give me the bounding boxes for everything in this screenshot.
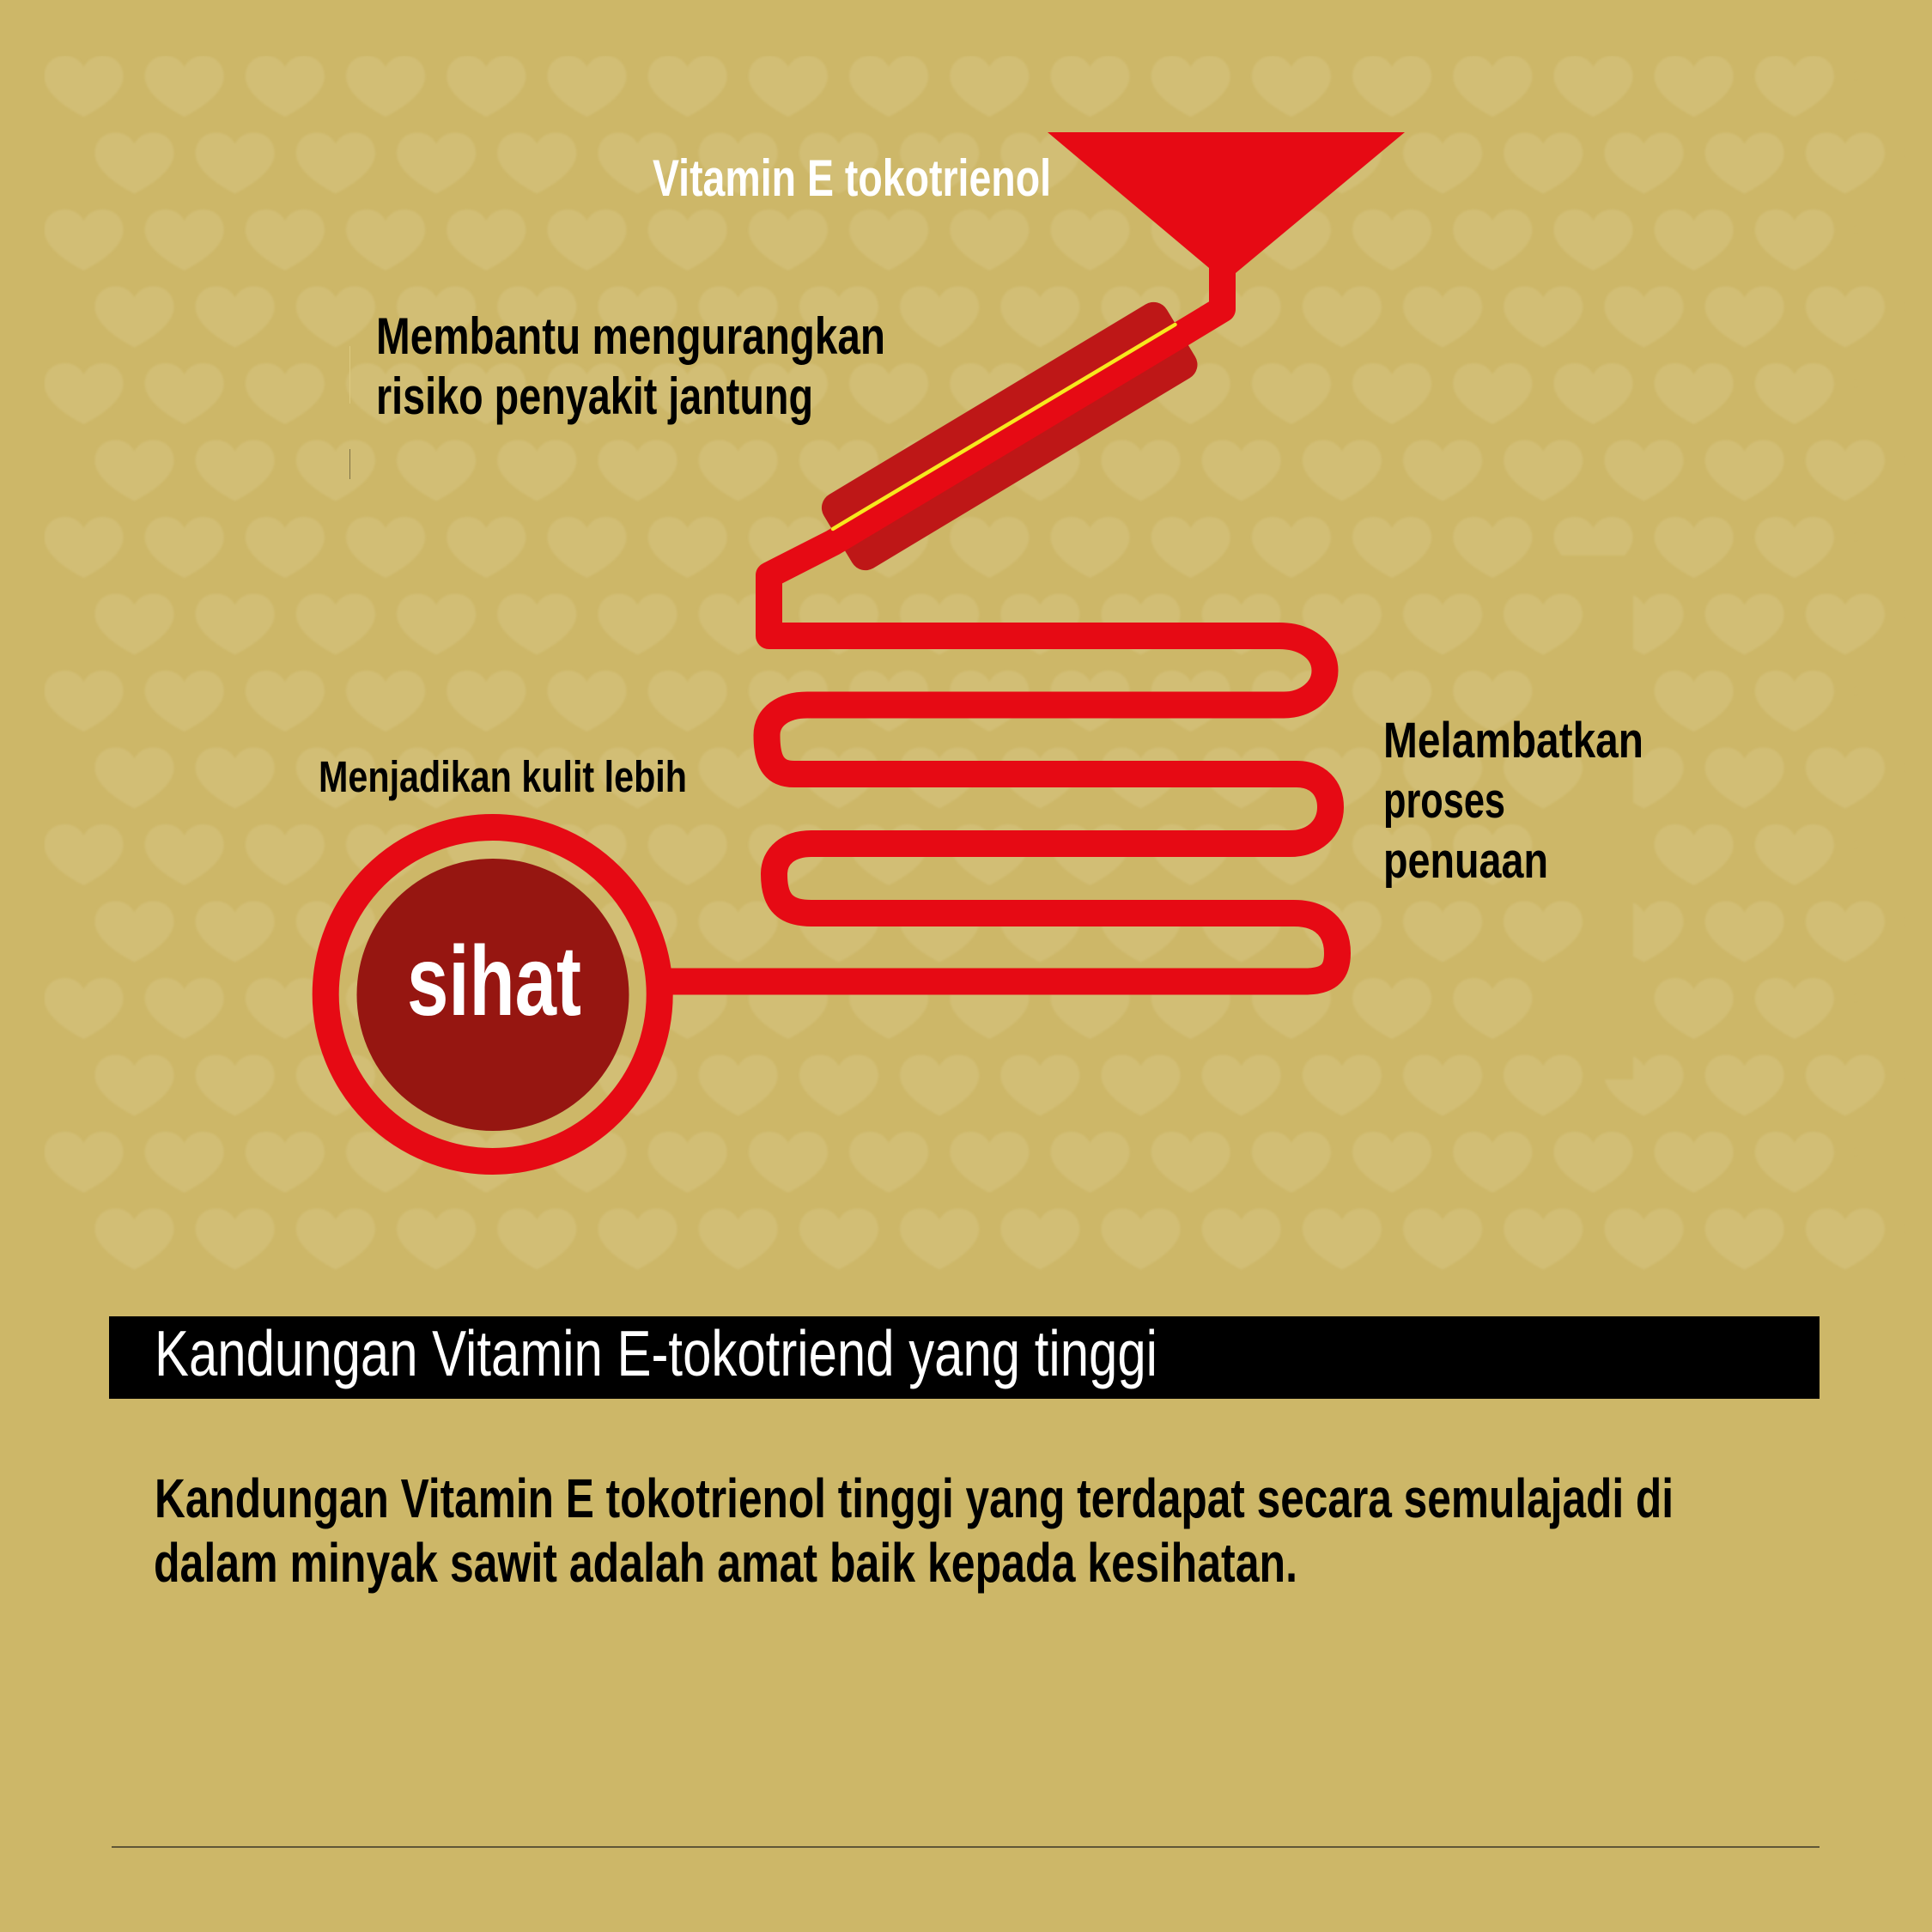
title bar: Kandungan Vitamin E-tokotriend yang tinggi [155,1317,1157,1389]
dark red artery band [816,296,1203,576]
heading: Vitamin E tokotrienol: Vitamin E tokotrienol [653,149,1051,207]
circle: sihat: sihat [407,927,581,1036]
label: Membantu mengurangkan risiko penyakit jantung [376,307,885,425]
label: Melambatkan proses penuaan [1383,713,1643,889]
heart pattern background [45,56,1906,1362]
label: Melambatkan proses penuaan: Melambatkan [1383,713,1643,769]
label: Melambatkan proses penuaan: penuaan [1383,833,1548,889]
label: Melambatkan proses penuaan: proses [1383,773,1505,829]
funnel [1048,132,1405,292]
label: Membantu mengurangkan risiko penyakit jantung: Membantu mengurangkan [376,307,885,365]
red winding pipe [661,283,1338,981]
body text: dalam minyak sawit adalah amat baik kepada kesihatan. [154,1532,1297,1594]
yellow blood flow line [833,325,1175,529]
title bar [109,1316,1820,1399]
circle: sihat [325,828,659,1161]
label: Membantu mengurangkan risiko penyakit jantung: risiko penyakit jantung [376,368,813,425]
label: Menjadikan kulit lebih: Menjadikan kulit lebih [319,752,687,801]
body text [154,1467,1674,1594]
